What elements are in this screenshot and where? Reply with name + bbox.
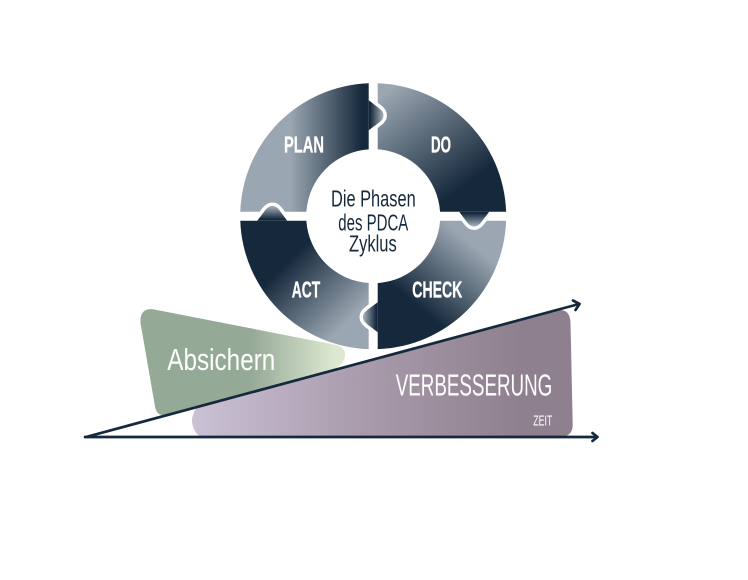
label: Absichern: Absichern — [167, 342, 275, 377]
center title — [331, 186, 416, 257]
label: PLAN: PLAN — [284, 131, 324, 157]
segment: ACT — [240, 221, 369, 349]
puzzle tab: ACT into PLAN — [257, 206, 287, 221]
center title: Die Phasen — [331, 186, 416, 212]
label: DO: DO — [431, 131, 451, 157]
panel: Verbesserung wedge — [192, 310, 573, 436]
puzzle tab: DO into CHECK — [459, 212, 489, 226]
panel: Absichern wedge — [140, 309, 345, 415]
arrow: rising improvement line — [86, 300, 580, 437]
label: VERBESSERUNG: VERBESSERUNG — [396, 368, 552, 403]
label: ZEIT: ZEIT — [533, 413, 552, 430]
segment: DO — [378, 83, 506, 212]
chart: PDCA puzzle ring — [240, 83, 506, 349]
center title: des PDCA — [338, 210, 409, 236]
puzzle tab: CHECK into ACT — [363, 302, 378, 332]
segment: PLAN — [240, 83, 369, 212]
label: ACT: ACT — [292, 276, 320, 302]
center title: Zyklus — [349, 231, 397, 257]
arrow: time axis — [85, 433, 598, 441]
puzzle tab: PLAN into DO — [369, 100, 383, 130]
segment: CHECK — [378, 221, 506, 349]
label: CHECK: CHECK — [412, 276, 463, 302]
